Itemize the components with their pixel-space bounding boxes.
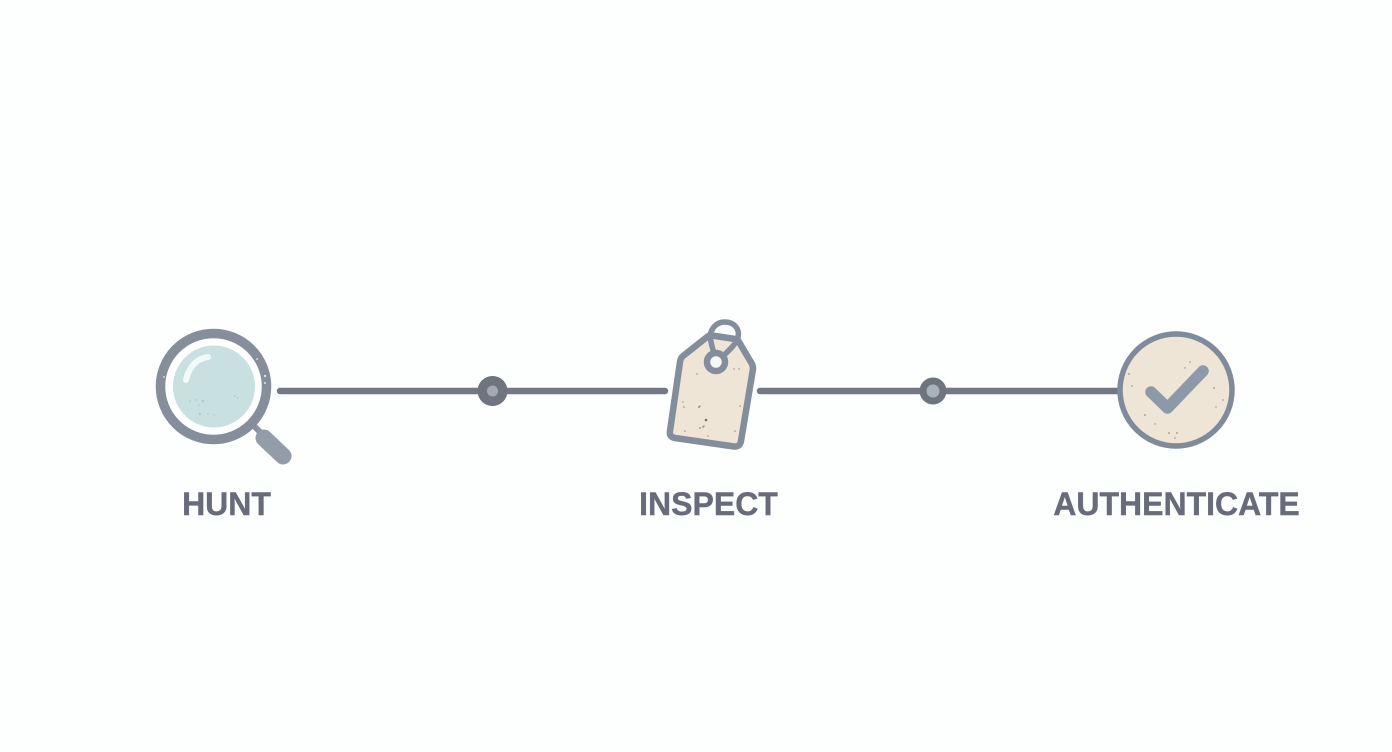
milestone dot 1: [478, 376, 508, 406]
icon: magnifying glass: [160, 334, 283, 456]
label: hunt: HUNT: [182, 486, 271, 522]
icon: check mark badge: [1120, 334, 1232, 446]
icon: price tag: [670, 322, 753, 447]
check mark: [1151, 371, 1203, 408]
label: authenticate: AUTHENTICATE: [1053, 486, 1300, 522]
connector line: hunt to inspect: [280, 388, 665, 394]
label: inspect: INSPECT: [639, 486, 778, 522]
connector line: inspect to authenticate: [760, 388, 1120, 394]
milestone dot 2: [920, 378, 946, 404]
